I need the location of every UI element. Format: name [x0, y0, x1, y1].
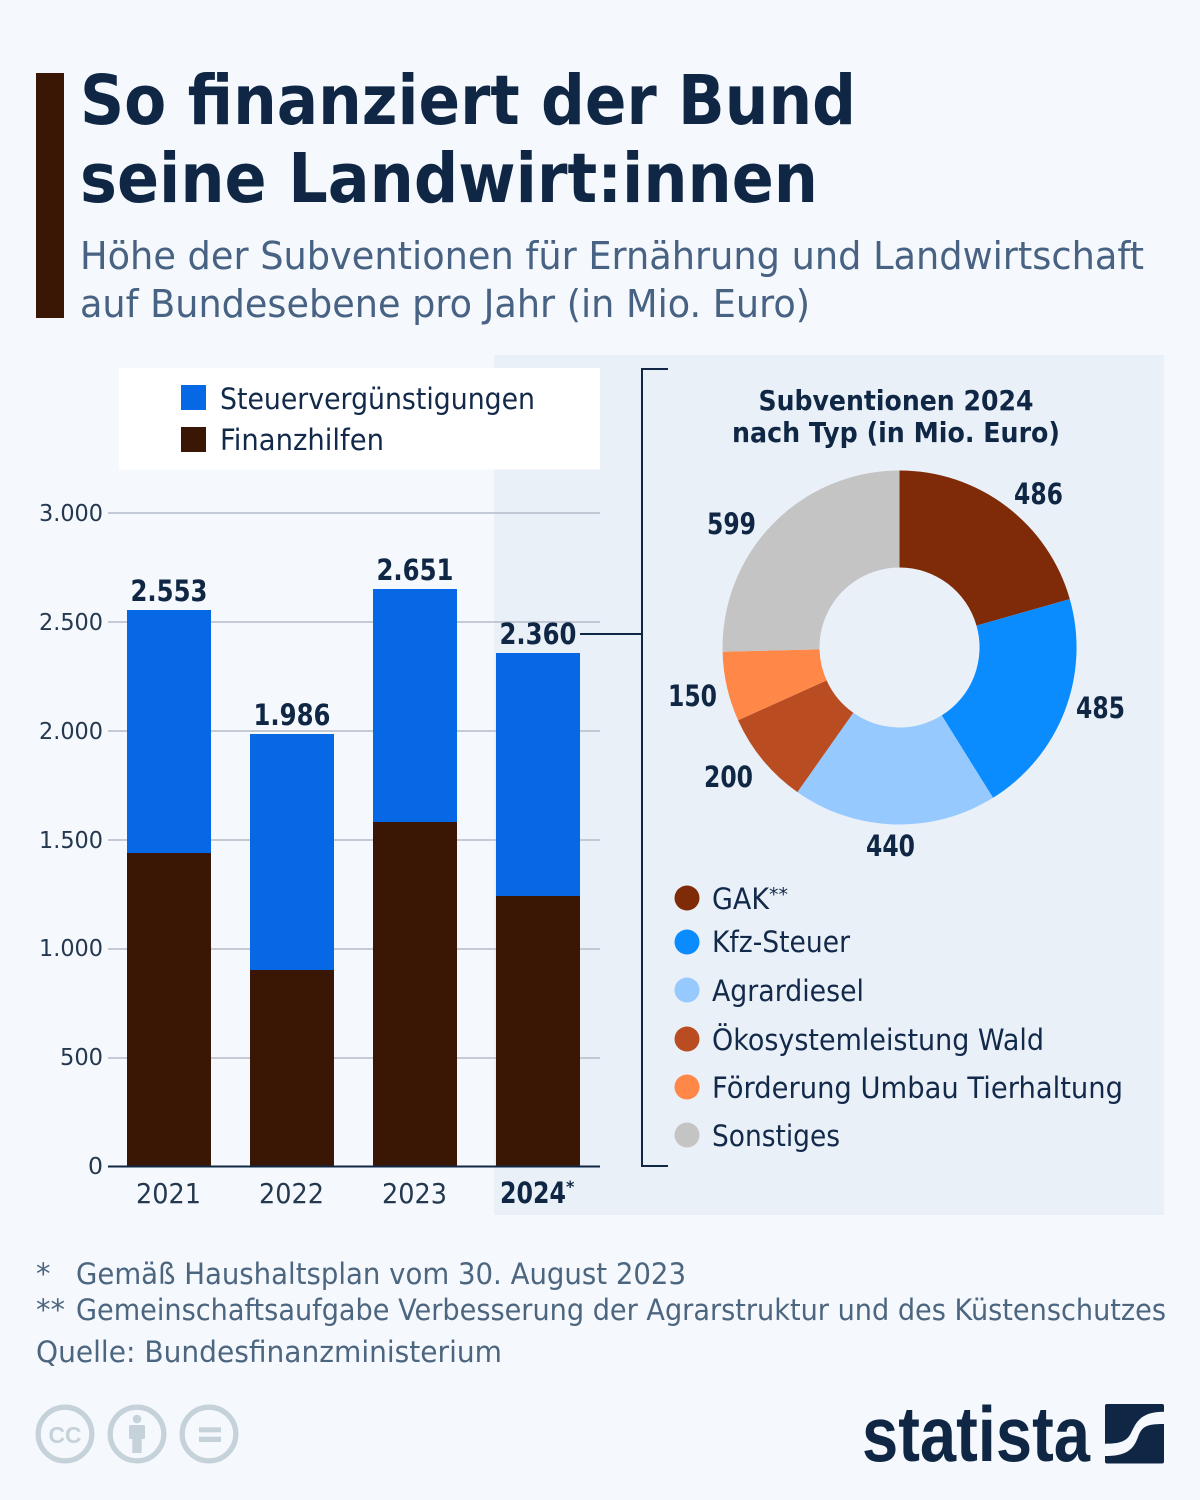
donut legend: GAK — [712, 882, 770, 916]
footnotes and source: Quelle: Bundesfinanzministerium — [36, 1335, 502, 1369]
bar 2022 — [250, 698, 334, 1166]
title: So finanziert der Bund — [80, 61, 856, 141]
statista wordmark: statista — [862, 1390, 1091, 1478]
y axis labels: 500 — [60, 1045, 103, 1071]
bar 2021: 2.553 — [130, 574, 208, 608]
donut legend: Agrardiesel — [712, 974, 864, 1008]
title — [80, 61, 856, 219]
icon: creative commons — [38, 1407, 92, 1461]
title: seine Landwirt:innen — [80, 139, 818, 219]
bar 2023 — [373, 553, 457, 1166]
donut value labels: 200 — [704, 760, 753, 794]
footnotes and source: Gemäß Haushaltsplan vom 30. August 2023 — [76, 1257, 686, 1291]
bar 2023: 2.651 — [376, 553, 454, 587]
donut legend — [674, 882, 1123, 1153]
donut value labels — [668, 477, 1125, 863]
x axis labels: 2022 — [259, 1177, 324, 1210]
donut value labels: 485 — [1076, 691, 1125, 725]
icon: attribution — [110, 1407, 164, 1461]
y axis labels: 1.000 — [39, 936, 103, 962]
donut legend: Kfz-Steuer — [712, 925, 850, 959]
title accent bar — [36, 73, 64, 318]
icon: no derivatives — [182, 1407, 236, 1461]
donut value labels: 599 — [707, 507, 756, 541]
donut value labels: 150 — [668, 679, 717, 713]
bar 2024: 2.360 — [500, 617, 576, 651]
bar chart legend: Steuervergünstigungen — [220, 382, 535, 416]
y axis labels: 2.000 — [39, 719, 103, 745]
bar chart — [39, 501, 600, 1210]
subtitle: auf Bundesebene pro Jahr (in Mio. Euro) — [80, 282, 810, 326]
bar 2024 — [496, 617, 580, 1166]
donut heading: nach Typ (in Mio. Euro) — [732, 416, 1060, 449]
icon: creative commons: CC — [48, 1422, 82, 1448]
footnotes and source: ** — [36, 1293, 65, 1327]
bracket connector — [580, 369, 668, 1166]
panel: 2024 highlight background — [494, 355, 1164, 1215]
x axis labels — [136, 1176, 575, 1210]
subtitle — [80, 234, 1144, 326]
icon: statista logo — [1105, 1404, 1164, 1464]
y axis labels: 3.000 — [39, 501, 103, 527]
donut value labels: 486 — [1014, 477, 1063, 511]
donut value labels: 440 — [866, 829, 915, 863]
x axis labels: 2021 — [136, 1177, 201, 1210]
bar 2021 — [127, 574, 211, 1166]
donut legend: Ökosystemleistung Wald — [712, 1023, 1044, 1057]
donut heading: Subventionen 2024 — [758, 384, 1034, 417]
x axis labels: 2024 — [500, 1176, 566, 1210]
footnotes and source — [36, 1257, 1166, 1369]
bar 2022: 1.986 — [254, 698, 330, 732]
bar chart legend: Finanzhilfen — [220, 423, 384, 457]
bar chart legend — [119, 368, 600, 470]
y axis labels — [39, 501, 103, 1180]
x axis labels: * — [566, 1177, 575, 1196]
x axis labels: 2023 — [382, 1177, 447, 1210]
donut chart — [723, 470, 1077, 825]
y axis labels: 0 — [88, 1154, 103, 1180]
donut legend: ** — [769, 884, 788, 906]
footnotes and source: * — [36, 1257, 50, 1291]
y axis labels: 1.500 — [39, 828, 103, 854]
subtitle: Höhe der Subventionen für Ernährung und Landwirtschaft — [80, 234, 1144, 278]
y axis labels: 2.500 — [39, 610, 103, 636]
donut legend: Sonstiges — [712, 1119, 840, 1153]
donut legend: Förderung Umbau Tierhaltung — [712, 1071, 1123, 1105]
donut heading — [732, 384, 1060, 449]
